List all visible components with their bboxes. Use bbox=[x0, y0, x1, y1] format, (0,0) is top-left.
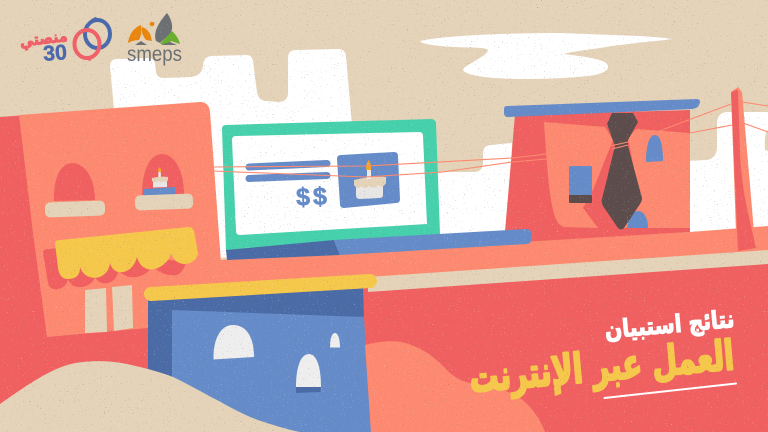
white skyline middle bbox=[340, 143, 512, 250]
laptop frame bbox=[222, 119, 440, 251]
blue window bbox=[646, 135, 663, 162]
title line 1: نتائج استبيان bbox=[604, 305, 736, 345]
ground band bbox=[148, 226, 768, 293]
salmon building bbox=[19, 102, 380, 337]
green leaf bbox=[160, 31, 180, 45]
left window bbox=[54, 163, 95, 201]
left sill bbox=[45, 200, 105, 218]
cloud bbox=[420, 33, 672, 79]
yellow roof bar bbox=[151, 281, 370, 294]
light leaf bbox=[142, 27, 152, 41]
door right bbox=[112, 285, 133, 331]
blue building bbox=[148, 288, 371, 432]
laptop base bbox=[334, 229, 531, 255]
cake on the shelf bbox=[144, 167, 175, 196]
awning shadow bbox=[43, 248, 186, 289]
dollar signs: $$ bbox=[296, 182, 330, 212]
blue ring bbox=[85, 18, 110, 48]
logo: smeps bbox=[127, 13, 182, 66]
cake card bbox=[337, 152, 400, 208]
red building bbox=[504, 99, 700, 243]
grey base left bbox=[135, 41, 147, 45]
smeps wordmark: smeps bbox=[127, 43, 182, 66]
roof bbox=[504, 99, 700, 117]
laptop screen bbox=[232, 132, 427, 235]
large arched window bbox=[213, 325, 254, 360]
blue front wall bbox=[172, 310, 371, 432]
grey base right bbox=[161, 42, 177, 45]
title line 2: العمل عبر الإنترنت bbox=[467, 332, 736, 402]
logo number: 30 bbox=[42, 40, 68, 66]
awning bbox=[55, 227, 198, 279]
right wall panel bbox=[620, 129, 690, 228]
medium arched window bbox=[296, 354, 321, 393]
orange leaf bbox=[128, 25, 141, 43]
small arched window bbox=[330, 333, 340, 348]
red ground bbox=[0, 114, 768, 432]
laptop bbox=[222, 119, 531, 260]
grey leaf bbox=[155, 13, 172, 43]
sand hill bbox=[0, 361, 300, 432]
necktie bbox=[602, 113, 642, 230]
white skyline left bbox=[110, 49, 352, 262]
logo: manassati 30 bbox=[18, 18, 110, 66]
right window bbox=[142, 154, 184, 195]
blue rectangular window bbox=[569, 166, 592, 203]
blue bump bbox=[627, 211, 648, 228]
title bbox=[467, 305, 736, 402]
logo arabic word: منصتي bbox=[18, 26, 69, 52]
title underline bbox=[604, 384, 736, 398]
string lights bbox=[213, 102, 768, 177]
white skyline right bbox=[685, 112, 768, 240]
orange dot bbox=[150, 22, 154, 26]
door left bbox=[85, 288, 107, 333]
pole bbox=[731, 87, 756, 251]
beige street strip bbox=[368, 250, 768, 292]
red ring bbox=[74, 30, 100, 60]
laptop base dark bbox=[226, 240, 340, 260]
right sill bbox=[135, 193, 193, 211]
peach blob bbox=[365, 341, 545, 432]
text lines bbox=[249, 164, 327, 178]
left wall panel bbox=[544, 122, 613, 228]
